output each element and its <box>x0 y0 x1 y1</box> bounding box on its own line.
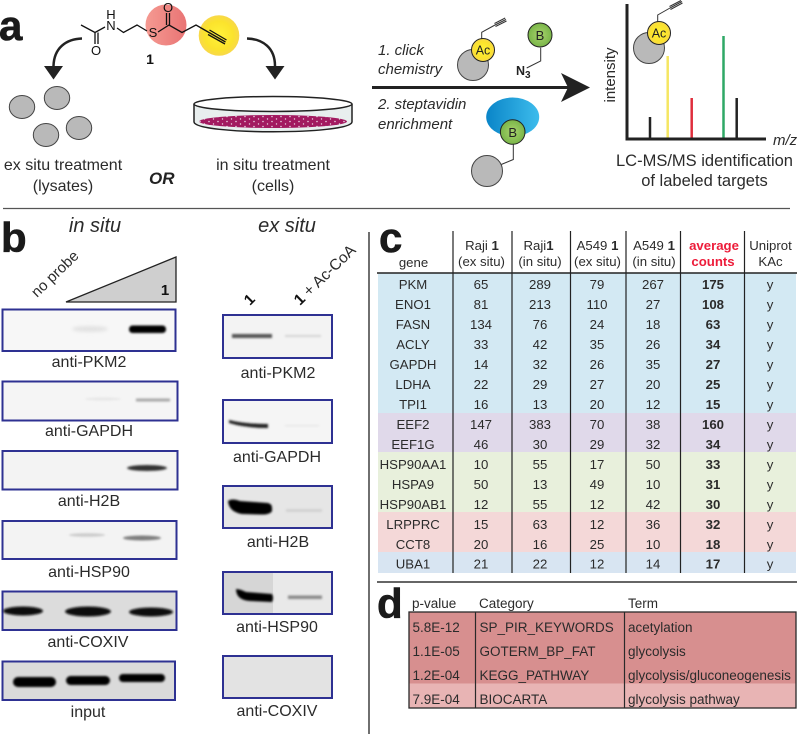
step labels: 2. steptavidin <box>377 96 466 113</box>
table rows: 79 <box>590 277 604 292</box>
table rows: HSPA9 <box>392 477 434 492</box>
table rows: 22 <box>474 377 488 392</box>
step labels: 1. click <box>378 42 424 59</box>
table rows: ENO1 <box>395 297 431 312</box>
blot ex situ anti-PKM2: anti-PKM2 <box>241 365 315 382</box>
table rows: y <box>767 457 774 472</box>
enrichment table body: glycolysis/gluconeogenesis <box>628 668 791 683</box>
blot in situ anti-PKM2 <box>2 310 176 371</box>
icon: biotin azide: B <box>536 28 544 43</box>
blot ex situ anti-H2B: anti-H2B <box>247 534 309 551</box>
blot ex situ anti-COXIV <box>223 656 332 720</box>
icon: acetylated protein: Ac <box>476 44 490 58</box>
table rows: LDHA <box>395 377 431 392</box>
table rows: 55 <box>533 497 547 512</box>
table rows: 70 <box>590 417 604 432</box>
icon: streptavidin enrichment: B <box>508 125 517 140</box>
probe molecule 1: 1 <box>146 51 154 67</box>
table rows: 289 <box>529 277 551 292</box>
table rows: y <box>767 497 774 512</box>
blot ex situ anti-GAPDH <box>223 400 332 466</box>
table rows: y <box>767 397 774 412</box>
table rows: 30 <box>706 497 720 512</box>
enrichment table body: KEGG_PATHWAY <box>480 668 589 683</box>
table rows: EEF1G <box>391 437 435 452</box>
table rows: y <box>767 437 774 452</box>
table rows: 33 <box>474 337 488 352</box>
table rows: 34 <box>706 437 721 452</box>
table rows: GAPDH <box>390 357 436 372</box>
table rows: 27 <box>646 297 660 312</box>
enrichment table body: 5.8E-12 <box>412 620 460 635</box>
table rows: EEF2 <box>397 417 429 432</box>
table header: (ex situ) <box>458 254 505 269</box>
table header: Raji 1 <box>465 238 499 253</box>
table rows: 29 <box>533 377 547 392</box>
table rows: PKM <box>399 277 427 292</box>
table rows: 34 <box>706 337 721 352</box>
blot ex situ anti-COXIV: anti-COXIV <box>237 703 318 720</box>
table rows: y <box>767 377 774 392</box>
table rows: 42 <box>646 497 660 512</box>
table rows: 25 <box>590 537 604 552</box>
table rows: y <box>767 317 774 332</box>
table rows: 63 <box>706 317 720 332</box>
table rows: y <box>767 556 774 572</box>
table rows: 35 <box>590 337 604 352</box>
enrichment table body: 1.1E-05 <box>412 644 460 659</box>
label: ex situ treatment: ex situ treatment <box>4 157 122 174</box>
table rows: 12 <box>590 556 604 572</box>
table rows: 17 <box>590 457 604 472</box>
table rows: HSP90AB1 <box>380 497 446 512</box>
table rows: UBA1 <box>396 556 430 572</box>
panel c: proteomics counts table <box>377 214 797 573</box>
panel b: western blots <box>1 214 360 721</box>
table rows: 10 <box>646 477 660 492</box>
table rows: 50 <box>646 457 660 472</box>
table rows: 175 <box>702 277 724 292</box>
arrow to cells <box>247 38 284 80</box>
table rows: 16 <box>533 537 547 552</box>
label: OR: OR <box>149 169 175 188</box>
table rows: 18 <box>706 537 720 552</box>
table rows: 267 <box>642 277 664 292</box>
probe gradient triangle <box>66 257 176 302</box>
step labels: chemistry <box>378 61 444 78</box>
enrichment table body: glycolysis pathway <box>628 692 740 707</box>
table rows: 42 <box>533 337 547 352</box>
table rows: 32 <box>706 517 720 532</box>
table rows: 160 <box>702 417 724 432</box>
table header: (in situ) <box>632 254 676 269</box>
blot ex situ anti-GAPDH: anti-GAPDH <box>233 449 321 466</box>
table header: KAc <box>758 254 783 269</box>
table rows: 12 <box>590 517 604 532</box>
axis label intensity: intensity <box>602 47 619 103</box>
panel letter c: c <box>379 214 402 261</box>
table rows: 12 <box>646 397 660 412</box>
step labels: enrichment <box>378 116 453 133</box>
table rows: 13 <box>533 477 547 492</box>
table rows: 35 <box>646 357 660 372</box>
table rows: 65 <box>474 277 488 292</box>
blot in situ anti-PKM2: anti-PKM2 <box>52 354 126 371</box>
probe molecule 1: O <box>91 43 101 58</box>
table header: (in situ) <box>518 254 562 269</box>
blot in situ input <box>2 662 175 721</box>
enrichment table body: GOTERM_BP_FAT <box>480 644 596 659</box>
table rows: 31 <box>706 477 720 492</box>
enrichment table body: 7.9E-04 <box>412 692 460 707</box>
table header: average <box>689 238 739 253</box>
table rows: 30 <box>533 437 547 452</box>
culture dish with cells <box>194 96 352 132</box>
table rows: y <box>767 337 774 352</box>
table rows: 15 <box>706 397 720 412</box>
label: ex situ treatment: (lysates) <box>33 178 93 195</box>
label: in situ treatment: (cells) <box>252 178 294 195</box>
table rows: CCT8 <box>396 537 430 552</box>
table header: gene <box>399 255 428 270</box>
icon: labeled protein: Ac <box>652 26 666 40</box>
table rows: 55 <box>533 457 547 472</box>
enrichment table header: p-value <box>412 596 456 611</box>
probe molecule 1 <box>81 0 239 67</box>
icon: acetylated protein <box>458 18 506 80</box>
blot ex situ anti-HSP90 <box>223 572 332 636</box>
icon: biotin azide <box>516 23 552 81</box>
enrichment table body: BIOCARTA <box>480 692 547 707</box>
table rows: 26 <box>646 337 660 352</box>
table rows: 32 <box>533 357 547 372</box>
table header <box>399 238 792 270</box>
table rows: 16 <box>474 397 488 412</box>
table header: A549 1 <box>577 238 618 253</box>
table rows: 15 <box>474 517 488 532</box>
table rows: 14 <box>474 357 488 372</box>
blot in situ input: input <box>71 704 106 721</box>
table rows: 10 <box>474 457 488 472</box>
panel letter b: b <box>1 214 27 261</box>
table rows: 108 <box>702 297 724 312</box>
table rows: LRPPRC <box>386 517 440 532</box>
lysate particles <box>9 86 92 146</box>
blot in situ anti-H2B <box>2 451 178 510</box>
arrow to lysates <box>44 38 82 80</box>
heading ex situ: ex situ <box>258 215 316 237</box>
table rows: FASN <box>396 317 430 332</box>
table rows: 26 <box>590 357 604 372</box>
table rows: y <box>767 477 774 492</box>
table rows: 20 <box>646 377 660 392</box>
table rows <box>380 277 774 572</box>
table rows: 27 <box>590 377 604 392</box>
table rows: 12 <box>590 497 604 512</box>
enrichment table body <box>409 612 796 708</box>
blot in situ anti-HSP90 <box>2 521 176 581</box>
table rows: 38 <box>646 417 660 432</box>
table rows: 13 <box>533 397 547 412</box>
lane label 1: 1 <box>241 291 259 309</box>
table rows: y <box>767 277 774 292</box>
table rows: 50 <box>474 477 488 492</box>
heading in situ: in situ <box>69 215 121 237</box>
table rows: 20 <box>590 397 604 412</box>
table rows: 18 <box>646 317 660 332</box>
panel d: enrichment table <box>377 580 796 708</box>
enrichment table body: 1.2E-04 <box>412 668 460 683</box>
probe molecule 1: S <box>149 25 158 40</box>
blot ex situ anti-PKM2 <box>223 315 332 382</box>
axis label m/z: m/z <box>773 132 798 149</box>
table rows: 10 <box>646 537 660 552</box>
table rows: 76 <box>533 317 547 332</box>
table rows: 63 <box>533 517 547 532</box>
enrichment table body: SP_PIR_KEYWORDS <box>480 620 614 635</box>
table rows: y <box>767 537 774 552</box>
probe molecule 1: N <box>106 18 116 33</box>
spectrum axes <box>627 4 766 139</box>
caption: LC-MS/MS identification: of labeled targets <box>641 172 768 190</box>
table rows: 29 <box>590 437 604 452</box>
table rows: HSP90AA1 <box>380 457 446 472</box>
lane label no probe: no probe <box>28 248 82 301</box>
probe gradient triangle: 1 <box>161 282 169 299</box>
spectrum peaks <box>650 36 737 139</box>
enrichment table header: Category <box>479 596 534 611</box>
blot in situ anti-GAPDH <box>2 382 178 440</box>
blot ex situ anti-HSP90: anti-HSP90 <box>236 619 318 636</box>
chart: mass spectrum <box>602 0 798 149</box>
table rows: 383 <box>529 417 551 432</box>
table rows: y <box>767 297 774 312</box>
table header: Raji1 <box>523 238 554 253</box>
blot ex situ anti-H2B <box>223 486 332 551</box>
table header: Uniprot <box>749 238 792 253</box>
enrichment table header <box>412 596 658 611</box>
probe molecule 1: O <box>163 0 173 15</box>
table rows: ACLY <box>396 337 430 352</box>
table rows: y <box>767 417 774 432</box>
table header: A549 1 <box>633 238 675 253</box>
table rows: 14 <box>646 556 660 572</box>
panel a: probe treatment workflow <box>0 0 798 195</box>
blot in situ anti-H2B: anti-H2B <box>58 493 120 510</box>
icon: biotin azide: N <box>516 64 525 78</box>
table header: counts <box>691 254 735 269</box>
enrichment table header: Term <box>628 596 658 611</box>
table row color bands <box>378 273 796 573</box>
table rows: 12 <box>474 497 488 512</box>
table rows: 21 <box>474 556 488 572</box>
icon: streptavidin enrichment <box>472 98 539 186</box>
table rows: 81 <box>474 297 488 312</box>
table rows: TPI1 <box>399 397 427 412</box>
icon: labeled protein <box>634 0 682 64</box>
table rows: 17 <box>706 556 720 572</box>
table rows: 32 <box>646 437 660 452</box>
blot in situ anti-HSP90: anti-HSP90 <box>48 564 130 581</box>
blot in situ anti-COXIV: anti-COXIV <box>48 634 129 651</box>
table rows: 33 <box>706 457 720 472</box>
blot in situ anti-GAPDH: anti-GAPDH <box>45 423 133 440</box>
enrichment table body: acetylation <box>628 620 693 635</box>
table rows: 24 <box>590 317 604 332</box>
lane label 1 + Ac-CoA: 1 + Ac-CoA <box>291 241 360 309</box>
table rows: 46 <box>474 437 488 452</box>
table rows: 49 <box>590 477 604 492</box>
table rows: 20 <box>474 537 488 552</box>
table rows: 213 <box>529 297 551 312</box>
enrichment table body: glycolysis <box>628 644 686 659</box>
table rows: 27 <box>706 357 720 372</box>
table rows: 134 <box>470 317 492 332</box>
panel letter d: d <box>377 580 403 627</box>
probe molecule 1: H <box>106 7 116 22</box>
icon: biotin azide: 3 <box>525 70 531 81</box>
table rows: 36 <box>646 517 660 532</box>
table rows: y <box>767 357 774 372</box>
table header: (ex situ) <box>574 254 621 269</box>
table rows: 110 <box>586 297 608 312</box>
table rows: 22 <box>533 556 547 572</box>
caption: LC-MS/MS identification: LC-MS/MS identification <box>616 152 793 170</box>
blot in situ anti-COXIV <box>2 592 176 651</box>
main process arrow <box>372 73 590 102</box>
label: in situ treatment: in situ treatment <box>216 157 330 174</box>
table rows: 147 <box>470 417 492 432</box>
table rows: y <box>767 517 774 532</box>
table rows: 25 <box>706 377 720 392</box>
